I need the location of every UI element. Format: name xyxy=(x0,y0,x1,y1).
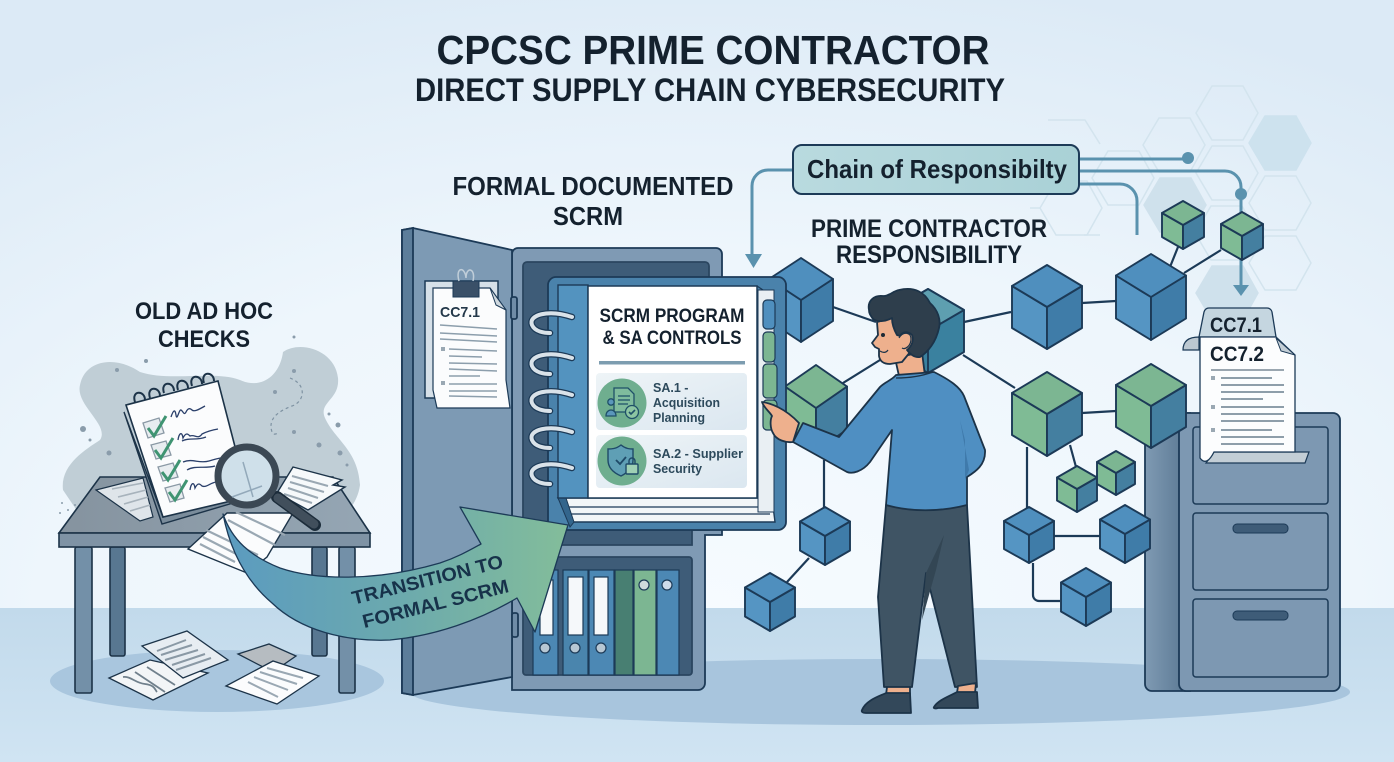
label: chain of responsibility: Chain of Responsibilty xyxy=(807,154,1067,184)
spiral rings xyxy=(134,374,214,402)
icon: acquisition document xyxy=(606,388,638,418)
background hexagon pattern xyxy=(1030,86,1311,320)
card: SA.1: Planning xyxy=(653,411,705,425)
papers on floor xyxy=(109,631,319,704)
paper: right on desk xyxy=(277,467,345,510)
heading: old ad hoc checks: CHECKS xyxy=(158,326,250,353)
label: chain of responsibility xyxy=(793,145,1079,194)
chain of responsibility connectors xyxy=(745,152,1249,296)
card: SA.2: Security xyxy=(653,462,702,476)
panel: cabinet with binder xyxy=(402,228,786,695)
arrow: transition to formal scrm xyxy=(223,507,568,640)
title: CPCSC PRIME CONTRACTOR xyxy=(436,27,990,73)
heading: old ad hoc checks xyxy=(135,298,273,353)
specks xyxy=(59,336,348,524)
drawer 1 xyxy=(1193,427,1328,504)
ankles xyxy=(886,683,976,695)
card: SA.1: SA.1 - xyxy=(653,381,688,395)
paper: centre on desk xyxy=(188,512,293,573)
open door xyxy=(402,228,518,695)
arrow: transition to formal scrm: TRANSITION TO xyxy=(350,552,505,610)
cube: blue overlapping cabinet xyxy=(1100,505,1150,563)
card: SA.1 xyxy=(596,373,747,430)
cabinet body xyxy=(512,248,722,690)
desk xyxy=(59,477,370,693)
magnifying glass xyxy=(218,447,315,525)
notepad with checklist xyxy=(124,374,250,524)
clipped document CC7.1: CC7.1 xyxy=(440,304,480,321)
heading: prime contractor responsibility xyxy=(811,215,1047,269)
hand pointing at binder xyxy=(762,402,799,442)
binder page xyxy=(588,286,757,498)
shoes xyxy=(862,693,911,713)
binder rings xyxy=(531,313,572,484)
heading: formal documented scrm: FORMAL DOCUMENTED xyxy=(452,171,734,201)
card: SA.2: SA.2 - Supplier xyxy=(653,447,743,461)
heading: prime contractor responsibility: RESPONSIBILITY xyxy=(836,241,1022,269)
heading: old ad hoc checks: OLD AD HOC xyxy=(135,298,273,325)
shirt xyxy=(793,372,985,510)
documents CC7.1 and CC7.2 xyxy=(1183,308,1309,463)
drawer 3 xyxy=(1193,599,1328,677)
person xyxy=(762,289,985,713)
binder title xyxy=(600,306,744,349)
clipped document CC7.1 xyxy=(425,270,510,408)
binder tabs xyxy=(763,300,777,430)
binder title: & SA CONTROLS xyxy=(602,328,742,349)
drawer 2 xyxy=(1193,513,1328,590)
panel: old ad hoc desk scene xyxy=(59,336,370,704)
binder title: SCRM PROGRAM xyxy=(600,306,744,327)
hair xyxy=(869,289,940,357)
icon: shield with lock xyxy=(608,445,638,476)
SCRM binder xyxy=(531,277,786,530)
smudge cloud xyxy=(63,347,360,530)
paper: left on desk xyxy=(96,478,153,521)
heading: formal documented scrm xyxy=(452,171,734,231)
heading: formal documented scrm: SCRM xyxy=(553,201,623,231)
binders on lower shelf xyxy=(533,570,679,675)
filing cabinet xyxy=(1145,413,1340,691)
cube: green overlapping cabinet xyxy=(1116,364,1186,448)
page stack xyxy=(558,498,775,522)
title xyxy=(415,27,1005,108)
trousers xyxy=(878,505,977,687)
network connector lines xyxy=(787,247,1221,601)
neck xyxy=(895,352,925,376)
card: SA.2 xyxy=(596,435,747,488)
handwriting scribbles xyxy=(171,406,231,490)
title: DIRECT SUPPLY CHAIN CYBERSECURITY xyxy=(415,72,1005,108)
binder spine xyxy=(558,285,588,498)
head xyxy=(872,315,920,364)
heading: prime contractor responsibility: PRIME CONTRACTOR xyxy=(811,215,1047,243)
card: SA.1: Acquisition xyxy=(653,396,720,410)
checkboxes xyxy=(143,418,184,502)
documents CC7.1 and CC7.2: CC7.1 xyxy=(1210,314,1262,337)
network cubes xyxy=(745,201,1263,631)
documents CC7.1 and CC7.2: CC7.2 xyxy=(1210,343,1264,366)
arrow: transition to formal scrm: FORMAL SCRM xyxy=(360,576,511,633)
